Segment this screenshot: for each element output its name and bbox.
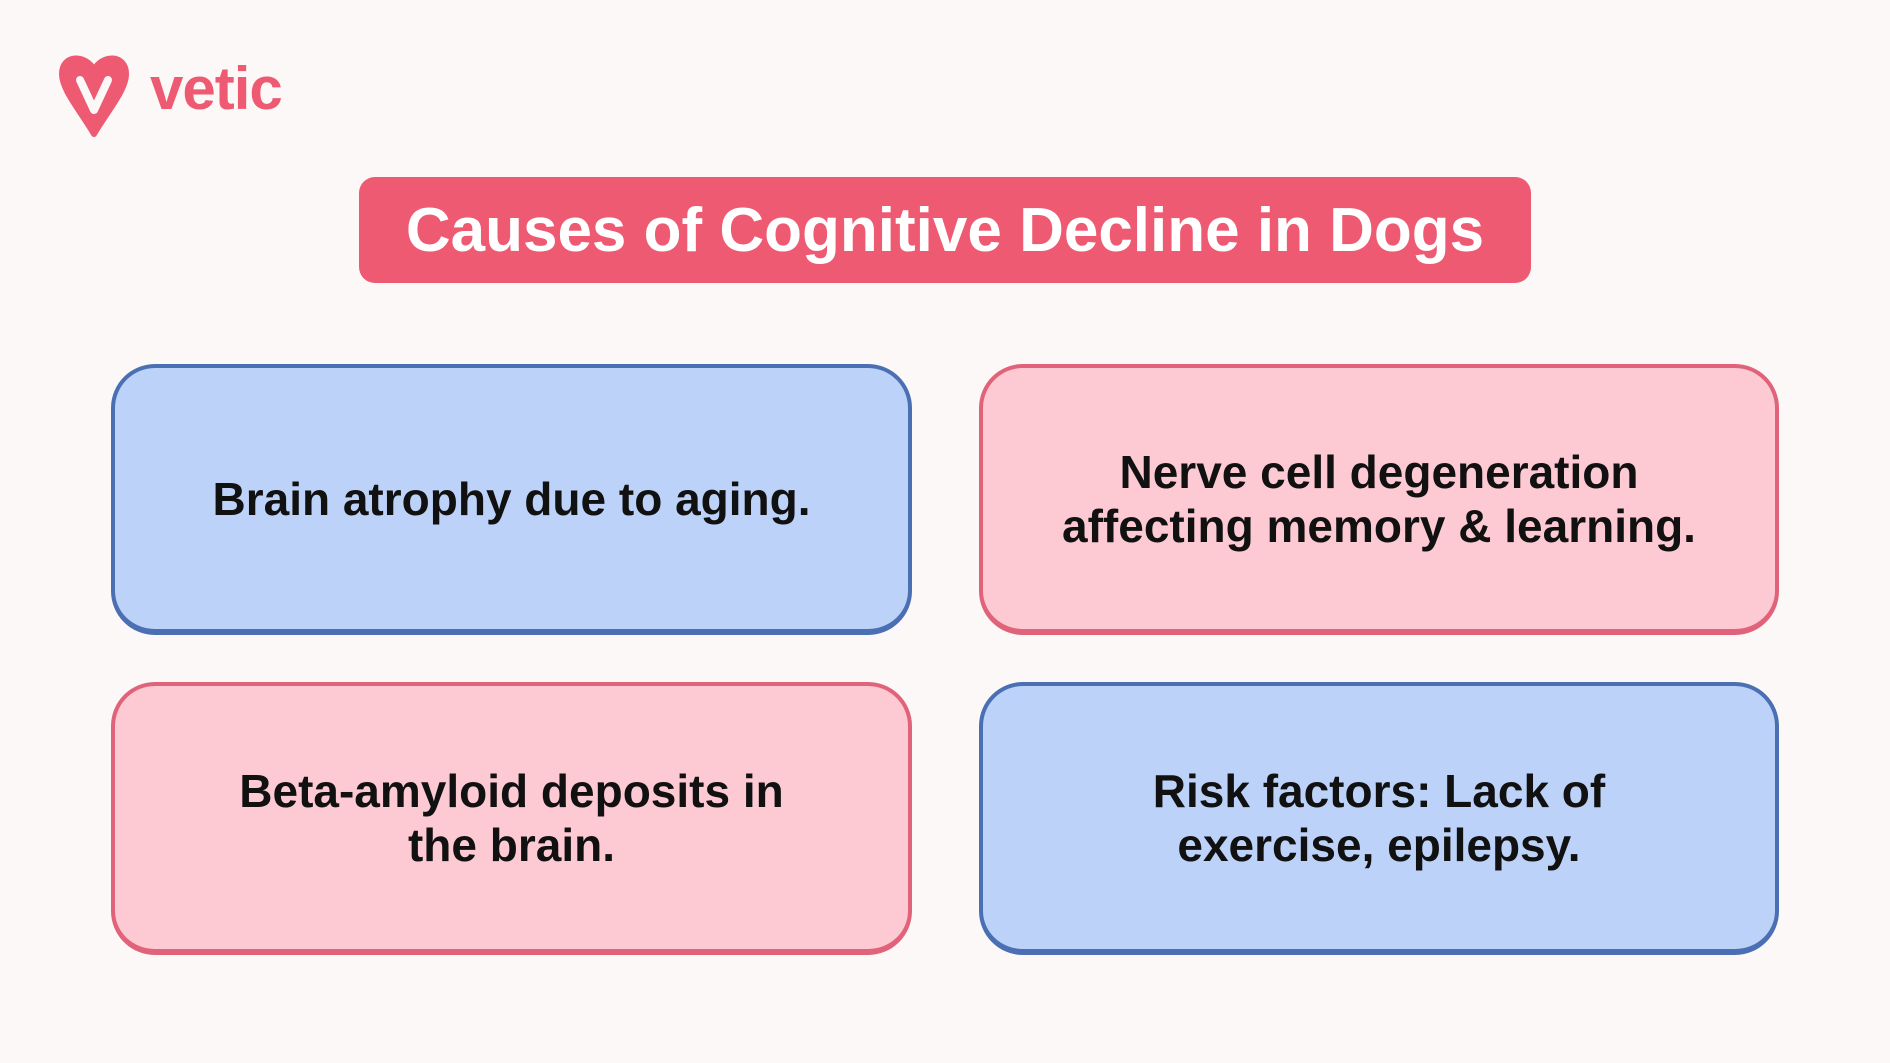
icon: heart V xyxy=(59,56,129,137)
panel: risk factors: exercise, epilepsy. xyxy=(1177,818,1581,870)
logo text: vetic xyxy=(150,55,282,122)
panel: beta-amyloid: the brain. xyxy=(408,818,615,870)
panel: brain atrophy xyxy=(111,364,912,635)
panel: beta-amyloid xyxy=(111,682,912,955)
title banner xyxy=(359,177,1531,283)
panel: nerve cell degeneration: affecting memory & learning. xyxy=(1062,500,1696,552)
panel: brain atrophy: Brain atrophy due to aging. xyxy=(212,472,811,524)
panel: risk factors: Risk factors: Lack of xyxy=(1153,764,1605,816)
panel: nerve cell degeneration xyxy=(979,364,1779,635)
panel: beta-amyloid: Beta-amyloid deposits in xyxy=(239,764,784,816)
title banner: Causes of Cognitive Decline in Dogs xyxy=(406,196,1484,264)
panel: nerve cell degeneration: Nerve cell degeneration xyxy=(1120,446,1638,498)
panel: risk factors xyxy=(979,682,1779,955)
logo xyxy=(59,55,282,137)
